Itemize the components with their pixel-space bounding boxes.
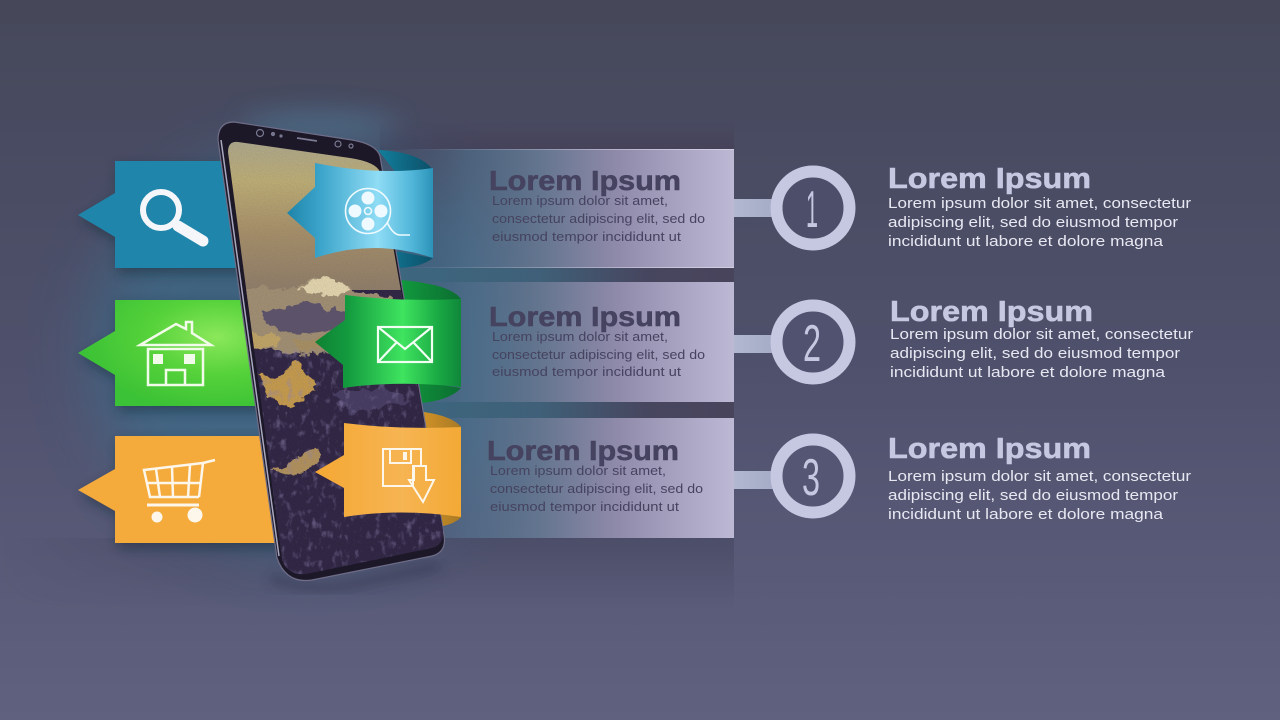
backdrop shading behind panels [0,115,734,610]
ribbon tag: mail [315,295,461,388]
right text block 2: Lorem ipsum dolor sit amet, consectetur [890,327,1193,343]
panel: row 2 band [400,282,734,402]
panel 1 text: Lorem ipsum dolor sit amet, [492,193,668,208]
ribbon tag: download [315,423,461,517]
right text block 1: Lorem Ipsum [888,163,1091,195]
right text block 1: Lorem ipsum dolor sit amet, consectetur [888,196,1191,212]
panel 3 heading: Lorem Ipsum [487,435,679,466]
panel 3 text: consectetur adipiscing elit, sed do [490,481,703,496]
left tag: home [78,300,273,411]
phone screen [228,142,444,574]
left tag: search [78,161,253,273]
right text block 2: Lorem Ipsum [890,296,1093,328]
panel 2 text: eiusmod tempor incididunt ut [492,364,681,379]
panel 2 text: Lorem ipsum dolor sit amet, [492,329,668,344]
right text block 1: incididunt ut labore et dolore magna [888,234,1164,250]
number badge 1: 1 [806,181,818,239]
panel 1 heading: Lorem Ipsum [489,165,681,196]
panel 2 heading: Lorem Ipsum [489,301,681,332]
right text block 2 [890,296,1193,381]
panel 1 text: eiusmod tempor incididunt ut [492,229,681,244]
icon: house [140,322,211,385]
icon: shopping cart [144,460,215,522]
phone [218,122,460,595]
right text block 1 [888,163,1191,250]
icon: floppy download [383,449,434,502]
icon: film reel [346,188,410,235]
right text block 2: incididunt ut labore et dolore magna [890,365,1166,381]
panel: row 1 band [400,149,734,268]
number badge 3: 3 [802,449,820,507]
ribbon tag: film [287,163,433,258]
right text block 3: incididunt ut labore et dolore magna [888,507,1164,523]
right text block 3: Lorem ipsum dolor sit amet, consectetur [888,469,1191,485]
phone body [218,122,444,581]
icon: magnifying glass [143,192,203,241]
panel 2 text: consectetur adipiscing elit, sed do [492,347,705,362]
number badge 1 [734,172,850,244]
left tag: cart [78,436,293,548]
panel 1 text: consectetur adipiscing elit, sed do [492,211,705,226]
right text block 3: adipiscing elit, sed do eiusmod tempor [888,488,1178,504]
phone camera notch [256,130,353,148]
panel 3 text: Lorem ipsum dolor sit amet, [490,463,666,478]
right text block 3 [888,433,1191,523]
number badge 2: 2 [803,315,821,373]
icon: envelope [378,327,432,362]
number badge 2 [734,306,850,378]
number badge 3 [734,440,850,512]
ribbon backs [378,150,461,526]
right text block 3: Lorem Ipsum [888,433,1091,465]
right text block 2: adipiscing elit, sed do eiusmod tempor [890,346,1180,362]
mountains [246,276,411,476]
panel: row 3 band [400,418,734,538]
right text block 1: adipiscing elit, sed do eiusmod tempor [888,215,1178,231]
panel 3 text: eiusmod tempor incididunt ut [490,499,679,514]
